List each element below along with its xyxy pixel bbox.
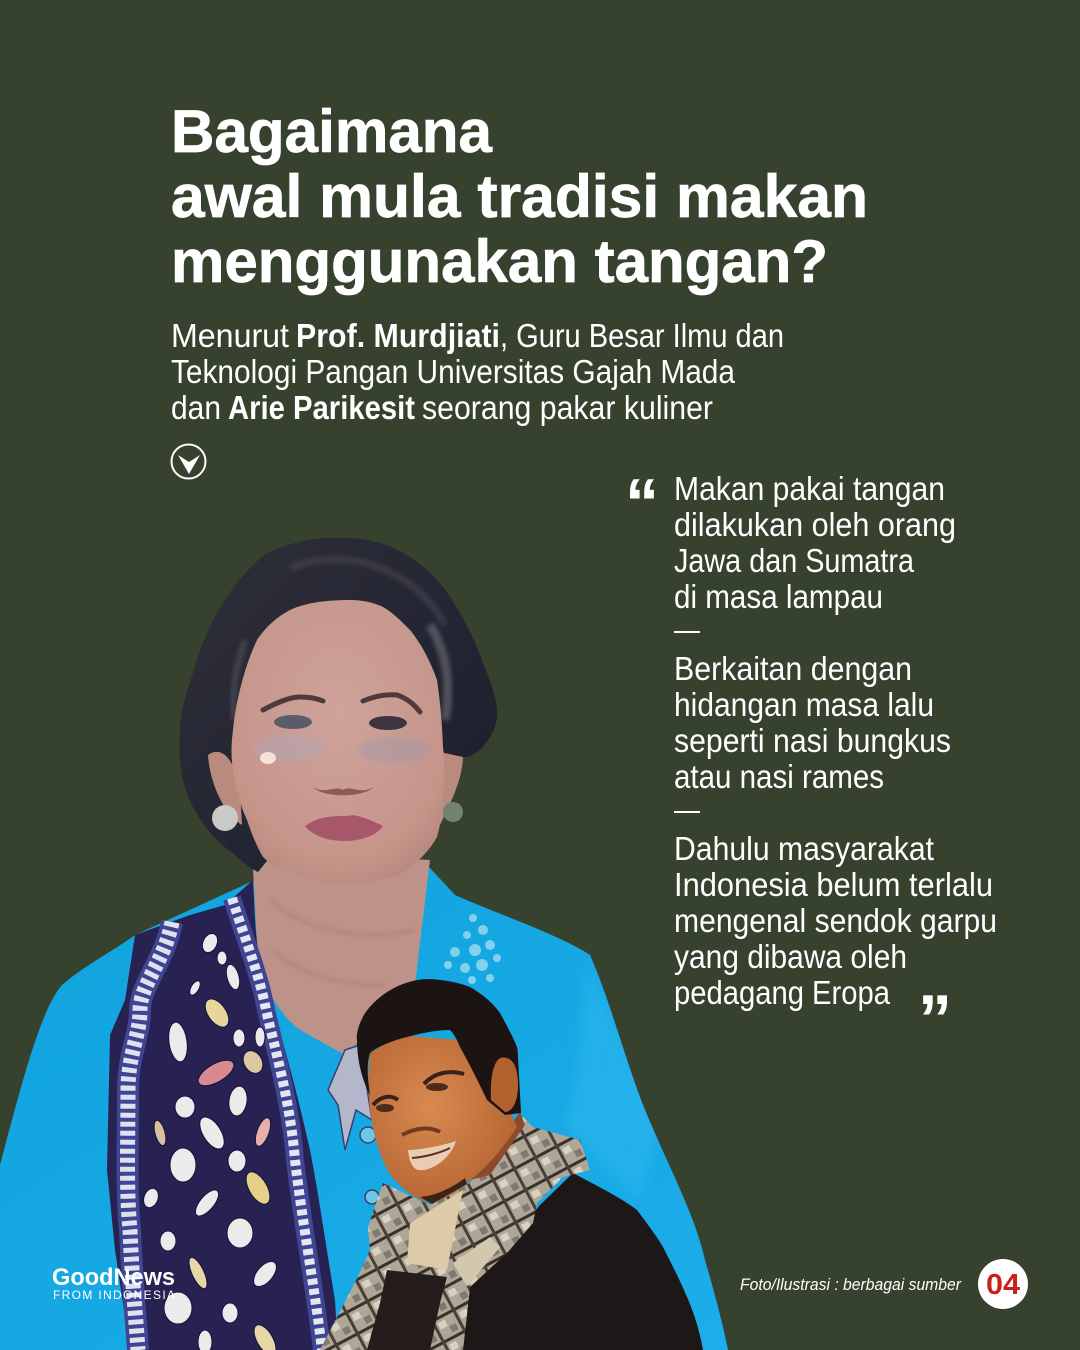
intro text: , Guru Besar Ilmu dan — [500, 317, 784, 354]
ear — [491, 1058, 518, 1112]
scarf left white band — [128, 922, 172, 1350]
intro text: Teknologi Pangan Universitas Gajah Mada — [171, 353, 736, 390]
quote text: mengenal sendok garpu — [674, 902, 997, 939]
title: menggunakan tangan? — [171, 228, 828, 295]
photo credit: Foto/Ilustrasi : berbagai sumber — [740, 1275, 962, 1294]
page number badge — [978, 1259, 1028, 1309]
title: awal mula tradisi makan — [171, 163, 868, 230]
icon: down arrow in circle — [172, 444, 206, 478]
intro text — [171, 317, 784, 426]
face — [368, 1035, 517, 1203]
quote text: Makan pakai tangan — [674, 470, 945, 507]
scarf right white band — [232, 898, 322, 1350]
blouse — [0, 868, 728, 1350]
quote text: Indonesia belum terlalu — [674, 866, 993, 903]
photo: Arie Parikesit — [320, 979, 703, 1350]
logo: GoodNews from Indonesia: GoodNews — [52, 1264, 175, 1291]
title: Bagaimana — [171, 98, 493, 165]
quote text: Dahulu masyarakat — [674, 830, 934, 867]
page number badge: 04 — [986, 1269, 1020, 1301]
batik motifs — [141, 931, 281, 1350]
brooch — [328, 1045, 379, 1204]
embroidery — [444, 914, 501, 984]
batik scarf — [107, 880, 338, 1350]
earrings — [212, 805, 238, 831]
logo: GoodNews from Indonesia: FROM INDONESIA — [53, 1288, 175, 1302]
blouse shading — [572, 986, 659, 1186]
scarf strip lower — [430, 1277, 470, 1350]
intro text: seorang pakar kuliner — [422, 389, 713, 426]
intro text: Prof. Murdjiati — [296, 317, 500, 354]
hair — [357, 979, 521, 1115]
photo: Prof. Murdjiati — [0, 538, 728, 1350]
neck and chest — [252, 850, 430, 1055]
quote text: di masa lampau — [674, 578, 883, 615]
quote text: Berkaitan dengan — [674, 650, 912, 687]
quote text: hidangan masa lalu — [674, 686, 934, 723]
sweater — [430, 1173, 703, 1350]
hair — [179, 538, 497, 872]
quote text: dilakukan oleh orang — [674, 506, 956, 543]
face — [232, 600, 444, 884]
title — [171, 98, 868, 295]
quote text: pedagang Eropa — [674, 974, 891, 1011]
scarf light folds — [407, 1190, 463, 1270]
dark area under the scarf — [367, 1270, 447, 1350]
quote text: Jawa dan Sumatra — [674, 542, 915, 579]
intro text: Menurut — [171, 317, 289, 354]
quote text: atau nasi rames — [674, 758, 884, 795]
neck — [470, 1112, 525, 1180]
ear left and right — [208, 752, 242, 825]
facial features — [254, 695, 431, 841]
intro text: Arie Parikesit — [228, 389, 415, 426]
quote text: seperti nasi bungkus — [674, 722, 951, 759]
opening quote mark: “ — [625, 465, 659, 541]
scarf — [320, 1117, 590, 1350]
closing quote mark: ” — [918, 981, 952, 1057]
intro text: dan — [171, 389, 221, 426]
quote text: yang dibawa oleh — [674, 938, 907, 975]
facial features — [373, 1072, 467, 1204]
quote text — [625, 465, 997, 1057]
